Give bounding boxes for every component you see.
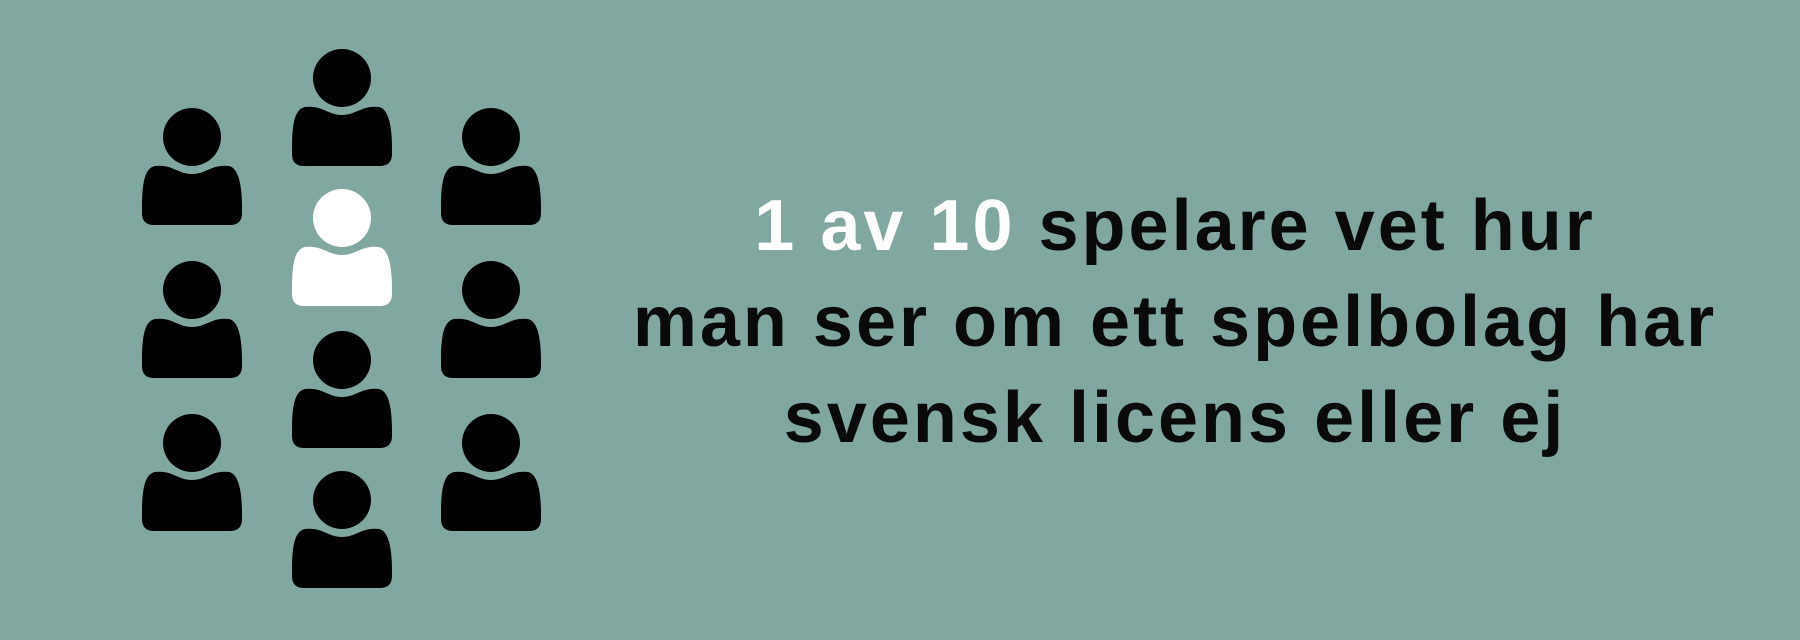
- icon: person col1 row2: [142, 261, 242, 378]
- icon group: people: [142, 49, 541, 588]
- headline text: svensk licens eller ej: [784, 378, 1566, 458]
- headline text: [633, 186, 1717, 458]
- icon: person col3 row1: [441, 108, 541, 225]
- icon: person col2 row1: [292, 49, 392, 166]
- headline text: 1 av 10 spelare vet hur: [754, 186, 1596, 266]
- icon: person col1 row1: [142, 108, 242, 225]
- icon: person col1 row3: [142, 414, 242, 531]
- icon: person col2 row4: [292, 471, 392, 588]
- icon: person col3 row3: [441, 414, 541, 531]
- icon: person col2 row3: [292, 331, 392, 448]
- headline text: man ser om ett spelbolag har: [633, 282, 1717, 362]
- icon: person col3 row2: [441, 261, 541, 378]
- icon: highlighted white person: [292, 189, 392, 306]
